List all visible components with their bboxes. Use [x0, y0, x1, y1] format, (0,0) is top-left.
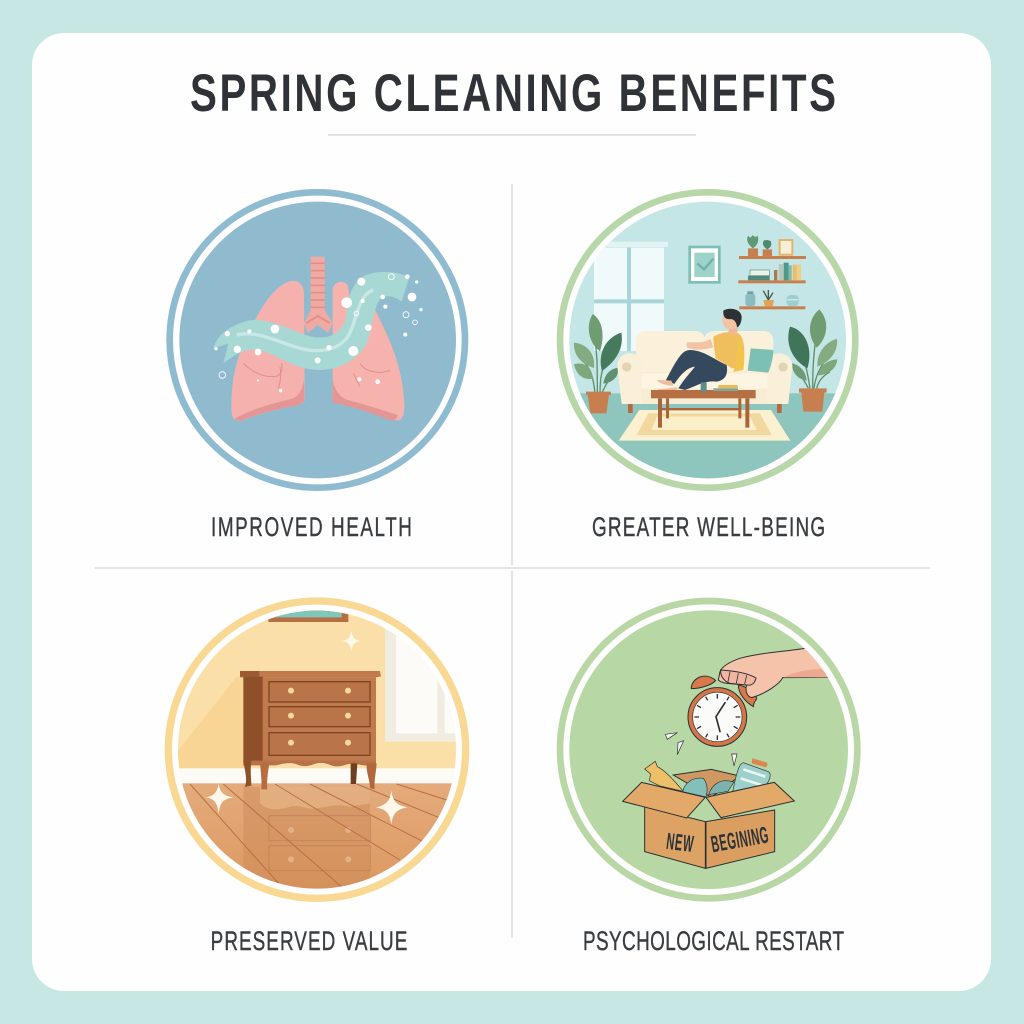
left lung — [231, 281, 305, 421]
picture — [688, 246, 721, 284]
icon: hand dropping clock into new beginning box — [560, 601, 857, 898]
icon: lungs with fresh air — [170, 192, 465, 488]
plants — [574, 314, 622, 413]
air stream — [213, 272, 409, 370]
shelves — [739, 256, 806, 259]
trachea — [304, 257, 333, 337]
clock — [691, 676, 716, 689]
particles — [214, 274, 423, 392]
shards — [665, 733, 677, 739]
label: preserved value: PRESERVED VALUE — [211, 926, 407, 956]
label: greater well-being: GREATER WELL-BEING — [592, 512, 825, 542]
box text: NEW — [665, 827, 695, 857]
person — [713, 332, 744, 368]
panel: greater well-being — [560, 192, 855, 542]
bottle — [645, 761, 683, 791]
sparkles — [205, 631, 407, 825]
dresser — [240, 671, 381, 677]
sofa — [636, 331, 773, 374]
right lung — [333, 282, 404, 420]
window — [594, 248, 664, 351]
label: psychological restart: PSYCHOLOGICAL RESTART — [583, 926, 844, 956]
legs — [243, 761, 251, 787]
title: SPRING CLEANING BENEFITS — [190, 63, 836, 122]
panel: psychological restart — [560, 601, 857, 956]
coffee table — [651, 390, 756, 398]
floor reflection — [243, 787, 370, 890]
box back — [673, 769, 740, 797]
rug — [619, 410, 790, 441]
box front — [645, 807, 705, 868]
baseboard — [173, 768, 460, 784]
panel: improved health — [170, 192, 465, 542]
icon: hand dropping clock into new beginning box: BEGINING — [709, 821, 770, 857]
label: improved health: IMPROVED HEALTH — [211, 512, 412, 542]
icon: polished dresser on shiny floor — [168, 601, 466, 898]
pillow — [748, 348, 773, 373]
hand — [718, 647, 837, 698]
icon: person relaxing in clean living room — [560, 192, 855, 488]
floor — [182, 783, 452, 889]
panel: preserved value — [168, 601, 466, 956]
window — [385, 627, 462, 742]
picture frame — [268, 610, 348, 622]
